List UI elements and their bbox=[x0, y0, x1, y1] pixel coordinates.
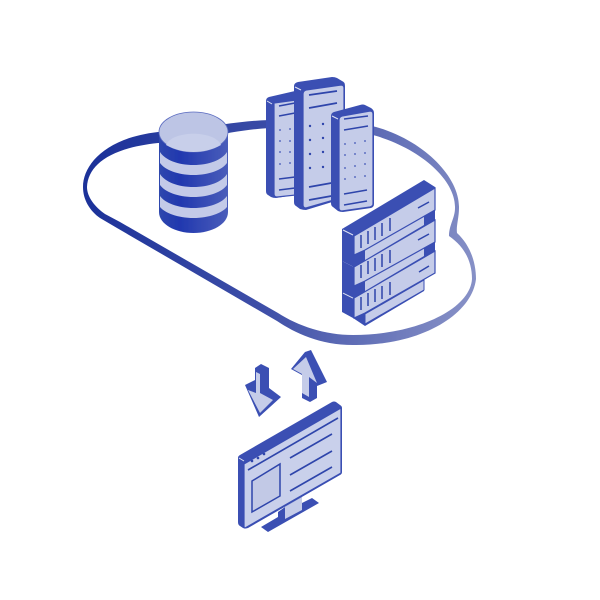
database top ellipse bbox=[159, 112, 228, 152]
icon: server tower middle bbox=[294, 77, 345, 210]
cloud outline bbox=[83, 119, 476, 345]
icon: upload arrow bbox=[291, 350, 327, 402]
database light band 1 bbox=[160, 152, 227, 175]
monitor stand bbox=[261, 497, 319, 532]
icon: server tower left bbox=[266, 91, 296, 198]
monitor casing bbox=[238, 402, 342, 528]
rack unit middle bbox=[342, 212, 435, 298]
monitor window dots bbox=[251, 453, 265, 462]
database light band 3 bbox=[160, 196, 227, 218]
monitor screen bbox=[244, 408, 341, 528]
icon: server tower right bbox=[331, 104, 374, 212]
monitor title bar line bbox=[248, 418, 338, 470]
monitor image panel bbox=[252, 464, 280, 512]
icon: monitor bbox=[238, 402, 342, 532]
rack unit bottom bbox=[342, 244, 435, 326]
monitor text lines bbox=[290, 434, 332, 491]
rack unit top bbox=[342, 180, 435, 267]
icon: download arrow bbox=[245, 364, 281, 417]
icon: rack servers bbox=[342, 180, 435, 326]
icon: database cylinder bbox=[159, 112, 228, 233]
illustration bbox=[83, 77, 476, 532]
database light band 2 bbox=[160, 174, 227, 197]
